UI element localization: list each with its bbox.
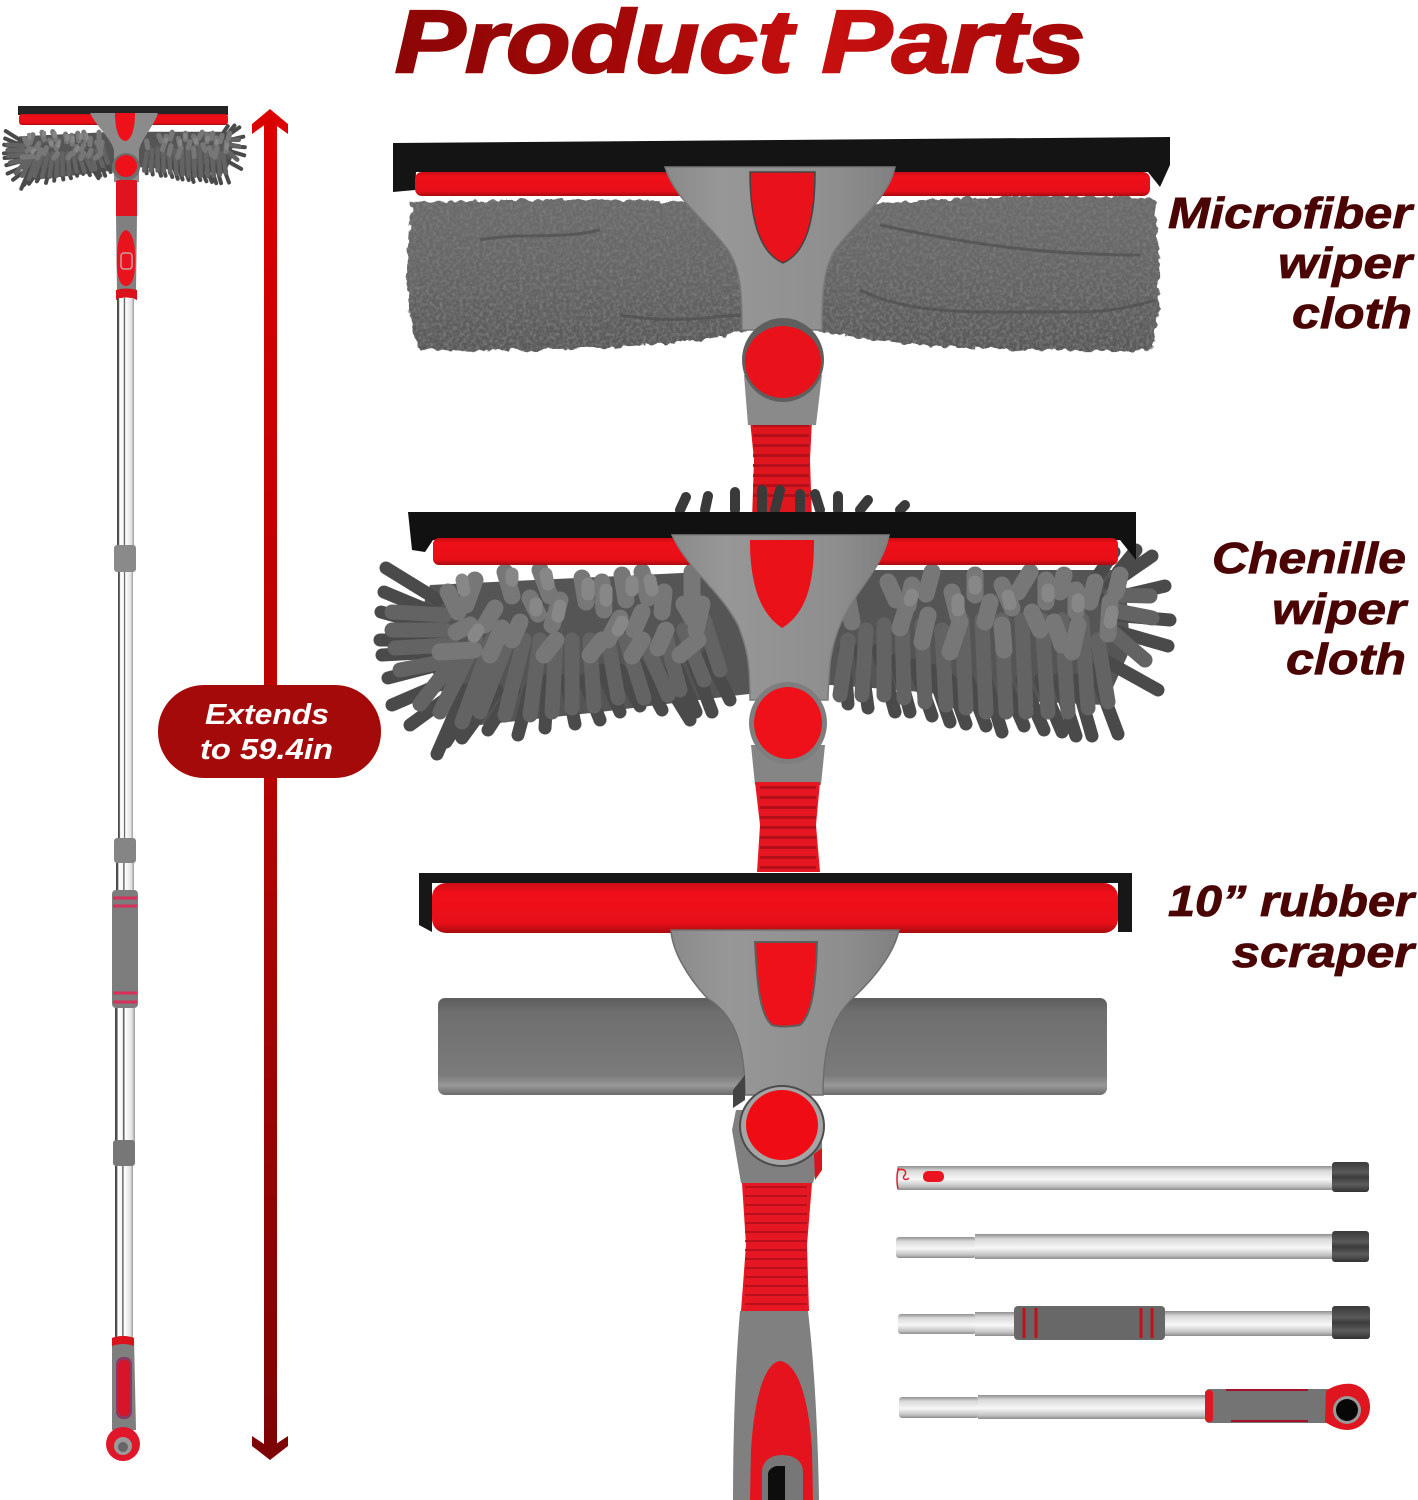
red bar (433, 538, 1118, 565)
label: microfiber wiper cloth (1168, 189, 1415, 338)
bracket (671, 930, 899, 1095)
red bar (415, 172, 1150, 196)
bellows (755, 782, 820, 872)
mini bracket and knob (90, 113, 158, 182)
label: 10 inch rubber scraper: 10” rubber (1168, 877, 1417, 926)
pole section 2 (896, 1231, 1369, 1262)
arrow: extended length (252, 109, 288, 1460)
microfiber wiper cloth (407, 196, 1159, 351)
label: chenille wiper cloth: wiper (1272, 585, 1409, 634)
scraper blade (393, 137, 1170, 192)
telescopic pole sections (112, 298, 138, 1340)
handle slot (762, 1455, 803, 1500)
label: 10 inch rubber scraper: scraper (1232, 928, 1417, 977)
neck bellows behind chenille head (750, 420, 812, 520)
label: chenille wiper cloth: Chenille (1212, 534, 1406, 583)
panel: chenille wiper head (380, 490, 1170, 872)
disassembled pole sections (896, 1162, 1370, 1430)
knob (742, 318, 824, 402)
label: 10 inch rubber scraper (1168, 877, 1417, 977)
label: microfiber wiper cloth: cloth (1292, 289, 1412, 338)
mini scraper blade (18, 106, 228, 125)
scraper blade (419, 873, 1132, 932)
assembled extended tool (4, 106, 245, 1461)
swivel lower (744, 375, 822, 425)
handle red grip (750, 1361, 813, 1500)
back strands (680, 490, 905, 510)
bracket red inset (750, 172, 815, 263)
rubber blade (438, 998, 1107, 1095)
swivel body (732, 1110, 822, 1183)
scraper blade (408, 512, 1136, 560)
bracket dark edge (733, 1075, 745, 1108)
knob (749, 682, 827, 764)
label: chenille wiper cloth: cloth (1286, 635, 1406, 684)
red bar (432, 883, 1118, 933)
label: chenille wiper cloth (1212, 534, 1409, 684)
mini grip handle (106, 1336, 140, 1461)
pole section 1 (897, 1162, 1369, 1192)
pole section 4 with end handle (899, 1384, 1370, 1430)
mini handle (116, 180, 137, 300)
bracket (672, 535, 889, 700)
panel: microfiber wiper head (393, 137, 1170, 425)
bellows (741, 1183, 812, 1311)
label: microfiber wiper cloth: Microfiber (1168, 189, 1415, 238)
bracket red inset (750, 540, 814, 628)
panel: rubber scraper head (419, 873, 1132, 1500)
swivel lower (751, 745, 825, 785)
callout: extends to 59.4in: Extends (205, 699, 329, 731)
chenille wiper cloth (380, 550, 1170, 754)
knob (740, 1086, 824, 1166)
bracket (665, 167, 895, 330)
callout: extends to 59.4in (158, 685, 381, 778)
pole section 3 (898, 1306, 1370, 1340)
callout: extends to 59.4in: to 59.4in (200, 734, 333, 766)
side clip (814, 1148, 822, 1180)
icon: mini chenille cloth (4, 126, 245, 189)
cloth fold lines (480, 225, 1155, 319)
bracket red inset (755, 942, 817, 1026)
handle (733, 1311, 819, 1500)
label: microfiber wiper cloth: wiper (1278, 239, 1415, 288)
